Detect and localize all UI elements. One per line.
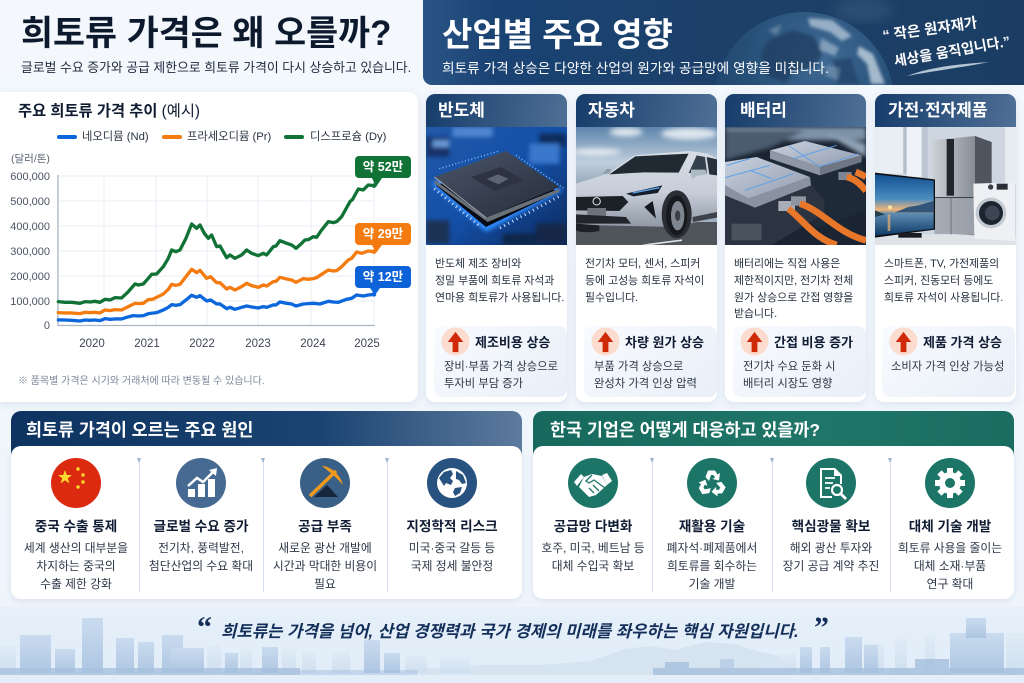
cause: China export control [24,458,128,591]
legend: neodymium [57,130,149,143]
card heading [576,94,717,127]
card text [734,258,853,320]
heading: 대체 기술 개발 [909,519,991,534]
response: recycling [651,458,773,592]
price label: dysprosium: 약 52만 [363,160,403,174]
impact text [743,360,836,390]
subtitle: 글로벌 수요 증가와 공급 제한으로 희토류 가격이 다시 상승하고 있습니다. [21,60,411,75]
icon: up arrow [740,328,768,356]
legend: praseodymium: 프라세오디뮴 (Pr) [187,131,271,143]
response: supply chain [541,458,645,573]
description [766,539,896,575]
impact text: 전기차 수요 둔화 시 [743,361,836,373]
price label: neodymium [355,266,411,288]
card text: 정밀 부품에 희토류 자석과 [435,275,554,287]
chart legend [57,130,386,143]
banner heading: 산업별 주요 영향 [442,16,673,53]
heading: 중국 수출 통제 [35,519,117,534]
cause: geopolitical risk [406,458,498,573]
impact heading: 차량 원가 상승 [625,335,704,350]
quote text: 희토류는 가격을 넘어, 산업 경쟁력과 국가 경제의 미래를 좌우하는 핵심 자원입니다. [221,622,799,641]
card text: 받습니다. [734,308,777,320]
heading: 글로벌 수요 증가 [153,519,249,534]
y axis labels: 400,000 [10,221,50,233]
legend: dysprosium: 디스프로슘 (Dy) [310,131,386,143]
description: 희토류를 회수하는 [667,559,757,573]
impact text [444,360,558,390]
heading: 재활용 기술 [679,519,745,534]
image: battery modules [725,127,866,245]
series: dysprosium [58,185,374,303]
series: neodymium [58,294,374,321]
x axis labels: 2021 [134,338,160,350]
description: 시간과 막대한 비용이 [273,559,377,573]
icon: growth chart [176,458,226,508]
impact text: 배터리 시장도 영향 [743,378,832,390]
x axis labels: 2023 [245,338,271,350]
chart heading: 주요 희토류 가격 추이 (예시) [18,103,200,120]
section heading: responses: 한국 기업은 어떻게 대응하고 있을까? [550,420,820,440]
card heading: 반도체 [438,101,485,120]
price label: praseodymium: 약 29만 [363,227,403,241]
card text [585,258,704,304]
impact text: 소비자 가격 인상 가능성 [891,361,1004,373]
response: securing minerals [770,458,892,592]
icon: document search [806,458,856,508]
description: 연구 확대 [927,577,973,591]
panel: price chart [0,92,418,402]
icon: up arrow [890,328,918,356]
icon: pickaxe [300,458,350,508]
card heading [426,94,567,127]
card heading [875,94,1016,127]
card heading: 가전·전자제품 [888,101,988,120]
series: praseodymium [58,251,374,314]
x axis labels [79,338,380,350]
impact text: 투자비 부담 증가 [444,378,523,390]
card text: 배터리에는 직접 사용은 [734,258,840,270]
icon: up arrow [442,328,470,356]
panel: automotive [576,94,717,402]
impact heading: 제조비용 상승 [475,335,550,350]
price label: dysprosium [355,156,411,178]
quote line 1: “ 작은 원자재가 [882,15,978,45]
header banner: industry impact [423,0,1024,85]
card text [884,258,1003,304]
quote [882,15,1011,69]
card heading: 배터리 [740,101,787,120]
impact text: 장비·부품 가격 상승으로 [444,361,558,373]
chart footnote: ※ 품목별 가격은 시기와 거래처에 따라 변동될 수 있습니다. [18,376,265,387]
divider [139,458,140,592]
description: 새로운 광산 개발에 [278,541,372,555]
banner subtitle: 희토류 가격 상승은 다양한 산업의 원가와 공급망에 영향을 미칩니다. [442,61,829,76]
description [149,541,253,573]
y axis labels: 100,000 [10,296,50,308]
icon: recycle [687,458,737,508]
description: 세계 생산의 대부분을 [24,541,128,555]
legend: dysprosium [284,130,386,143]
impact text: 부품 가격 상승으로 [594,361,683,373]
panel: battery [725,94,866,402]
icon: gear [925,458,975,508]
opening quote mark: “ [197,611,212,644]
description: 수출 제한 강화 [40,577,112,591]
description [273,541,377,591]
price label: neodymium: 약 12만 [363,270,403,284]
icon: China flag [51,458,101,508]
card text: 스마트폰, TV, 가전제품의 [884,258,999,270]
x axis labels: 2022 [189,338,215,350]
impact heading: 간접 비용 증가 [774,335,853,350]
x axis labels: 2024 [300,338,326,350]
heading: 공급 부족 [298,519,352,534]
price label: praseodymium [355,223,411,245]
impact box [584,326,717,397]
footer band with skyline [0,607,1024,683]
impact box [733,326,866,397]
icon: up arrow [592,328,620,356]
description [24,541,128,591]
description: 전기차, 풍력발전, [158,541,244,555]
card text: 제한적이지만, 전기차 전체 [734,275,853,287]
y axis labels: 600,000 [10,171,50,183]
description [647,539,777,593]
cause: global demand [149,458,253,573]
panel: semiconductor [426,94,567,402]
y axis labels: 0 [44,320,50,332]
legend: neodymium: 네오디뮴 (Nd) [82,131,149,143]
closing quote mark: ” [814,611,829,644]
card text: 반도체 제조 장비와 [435,258,521,270]
description: 필요 [314,577,336,591]
divider [652,458,653,592]
description: 폐자석·폐제품에서 [667,541,757,555]
y axis labels: 200,000 [10,271,50,283]
panel: responses [533,446,1014,599]
skyline illustration [0,607,1024,683]
card text: 희토류 자석이 사용됩니다. [884,292,1003,304]
card heading [725,94,866,127]
y axis labels [10,171,50,332]
quote line 2: 세상을 움직입니다.” [893,33,1011,69]
card text: 필수입니다. [585,292,638,304]
impact text [594,360,697,390]
description: 미국·중국 갈등 등 [409,541,495,555]
section heading: causes [11,411,522,456]
section heading: causes: 희토류 가격이 오르는 주요 원인 [26,420,253,440]
description [885,539,1015,593]
description: 대체 수입국 확보 [552,559,634,573]
description: 해외 광산 투자와 [790,541,872,555]
title block [21,14,411,75]
card text: 연마용 희토류가 사용됩니다. [435,292,564,304]
line chart [56,175,382,326]
icon: handshake [568,458,618,508]
impact text: 완성차 가격 인상 압력 [594,378,697,390]
main title: 희토류 가격은 왜 오를까? [21,14,391,53]
description: 희토류 사용을 줄이는 [898,541,1002,555]
section heading: responses [533,411,1014,456]
description: 기술 개발 [689,577,735,591]
card text: 스피커, 진동모터 등에도 [884,275,993,287]
card text [435,258,564,304]
description [409,541,495,573]
x axis labels: 2020 [79,338,105,350]
heading: 지정학적 리스크 [406,519,498,534]
cause: supply shortage [273,458,377,591]
heading: 공급망 다변화 [554,519,632,534]
y axis labels: 300,000 [10,246,50,258]
impact box [434,326,567,397]
impact heading: 제품 가격 상승 [923,335,1002,350]
y axis labels: 500,000 [10,196,50,208]
icon: globe [427,458,477,508]
impact box [882,326,1015,397]
description: 장기 공급 계약 추진 [783,559,879,573]
y axis unit: (달러/톤) [11,153,50,165]
card text: 등에 고성능 희토류 자석이 [585,275,704,287]
heading: 핵심광물 확보 [792,519,870,534]
globe illustration [719,0,988,85]
description: 차지하는 중국의 [36,559,116,573]
image: car [576,127,717,245]
card text: 원가 상승으로 간접 영향을 [734,292,853,304]
description: 국제 정세 불안정 [411,559,493,573]
image: chip [426,127,567,245]
description: 대체 소재·부품 [914,559,986,573]
panel: electronics [875,94,1016,402]
card heading: 자동차 [588,101,635,120]
description [541,541,645,573]
description: 첨단산업의 수요 확대 [149,559,253,573]
response: alternative technology [889,458,1011,592]
footer quote [195,613,835,651]
card text: 전기차 모터, 센서, 스피커 [585,258,700,270]
image: appliances [875,127,1016,245]
description: 호주, 미국, 베트남 등 [541,541,645,555]
panel: causes [11,446,522,599]
x axis labels: 2025 [354,338,380,350]
